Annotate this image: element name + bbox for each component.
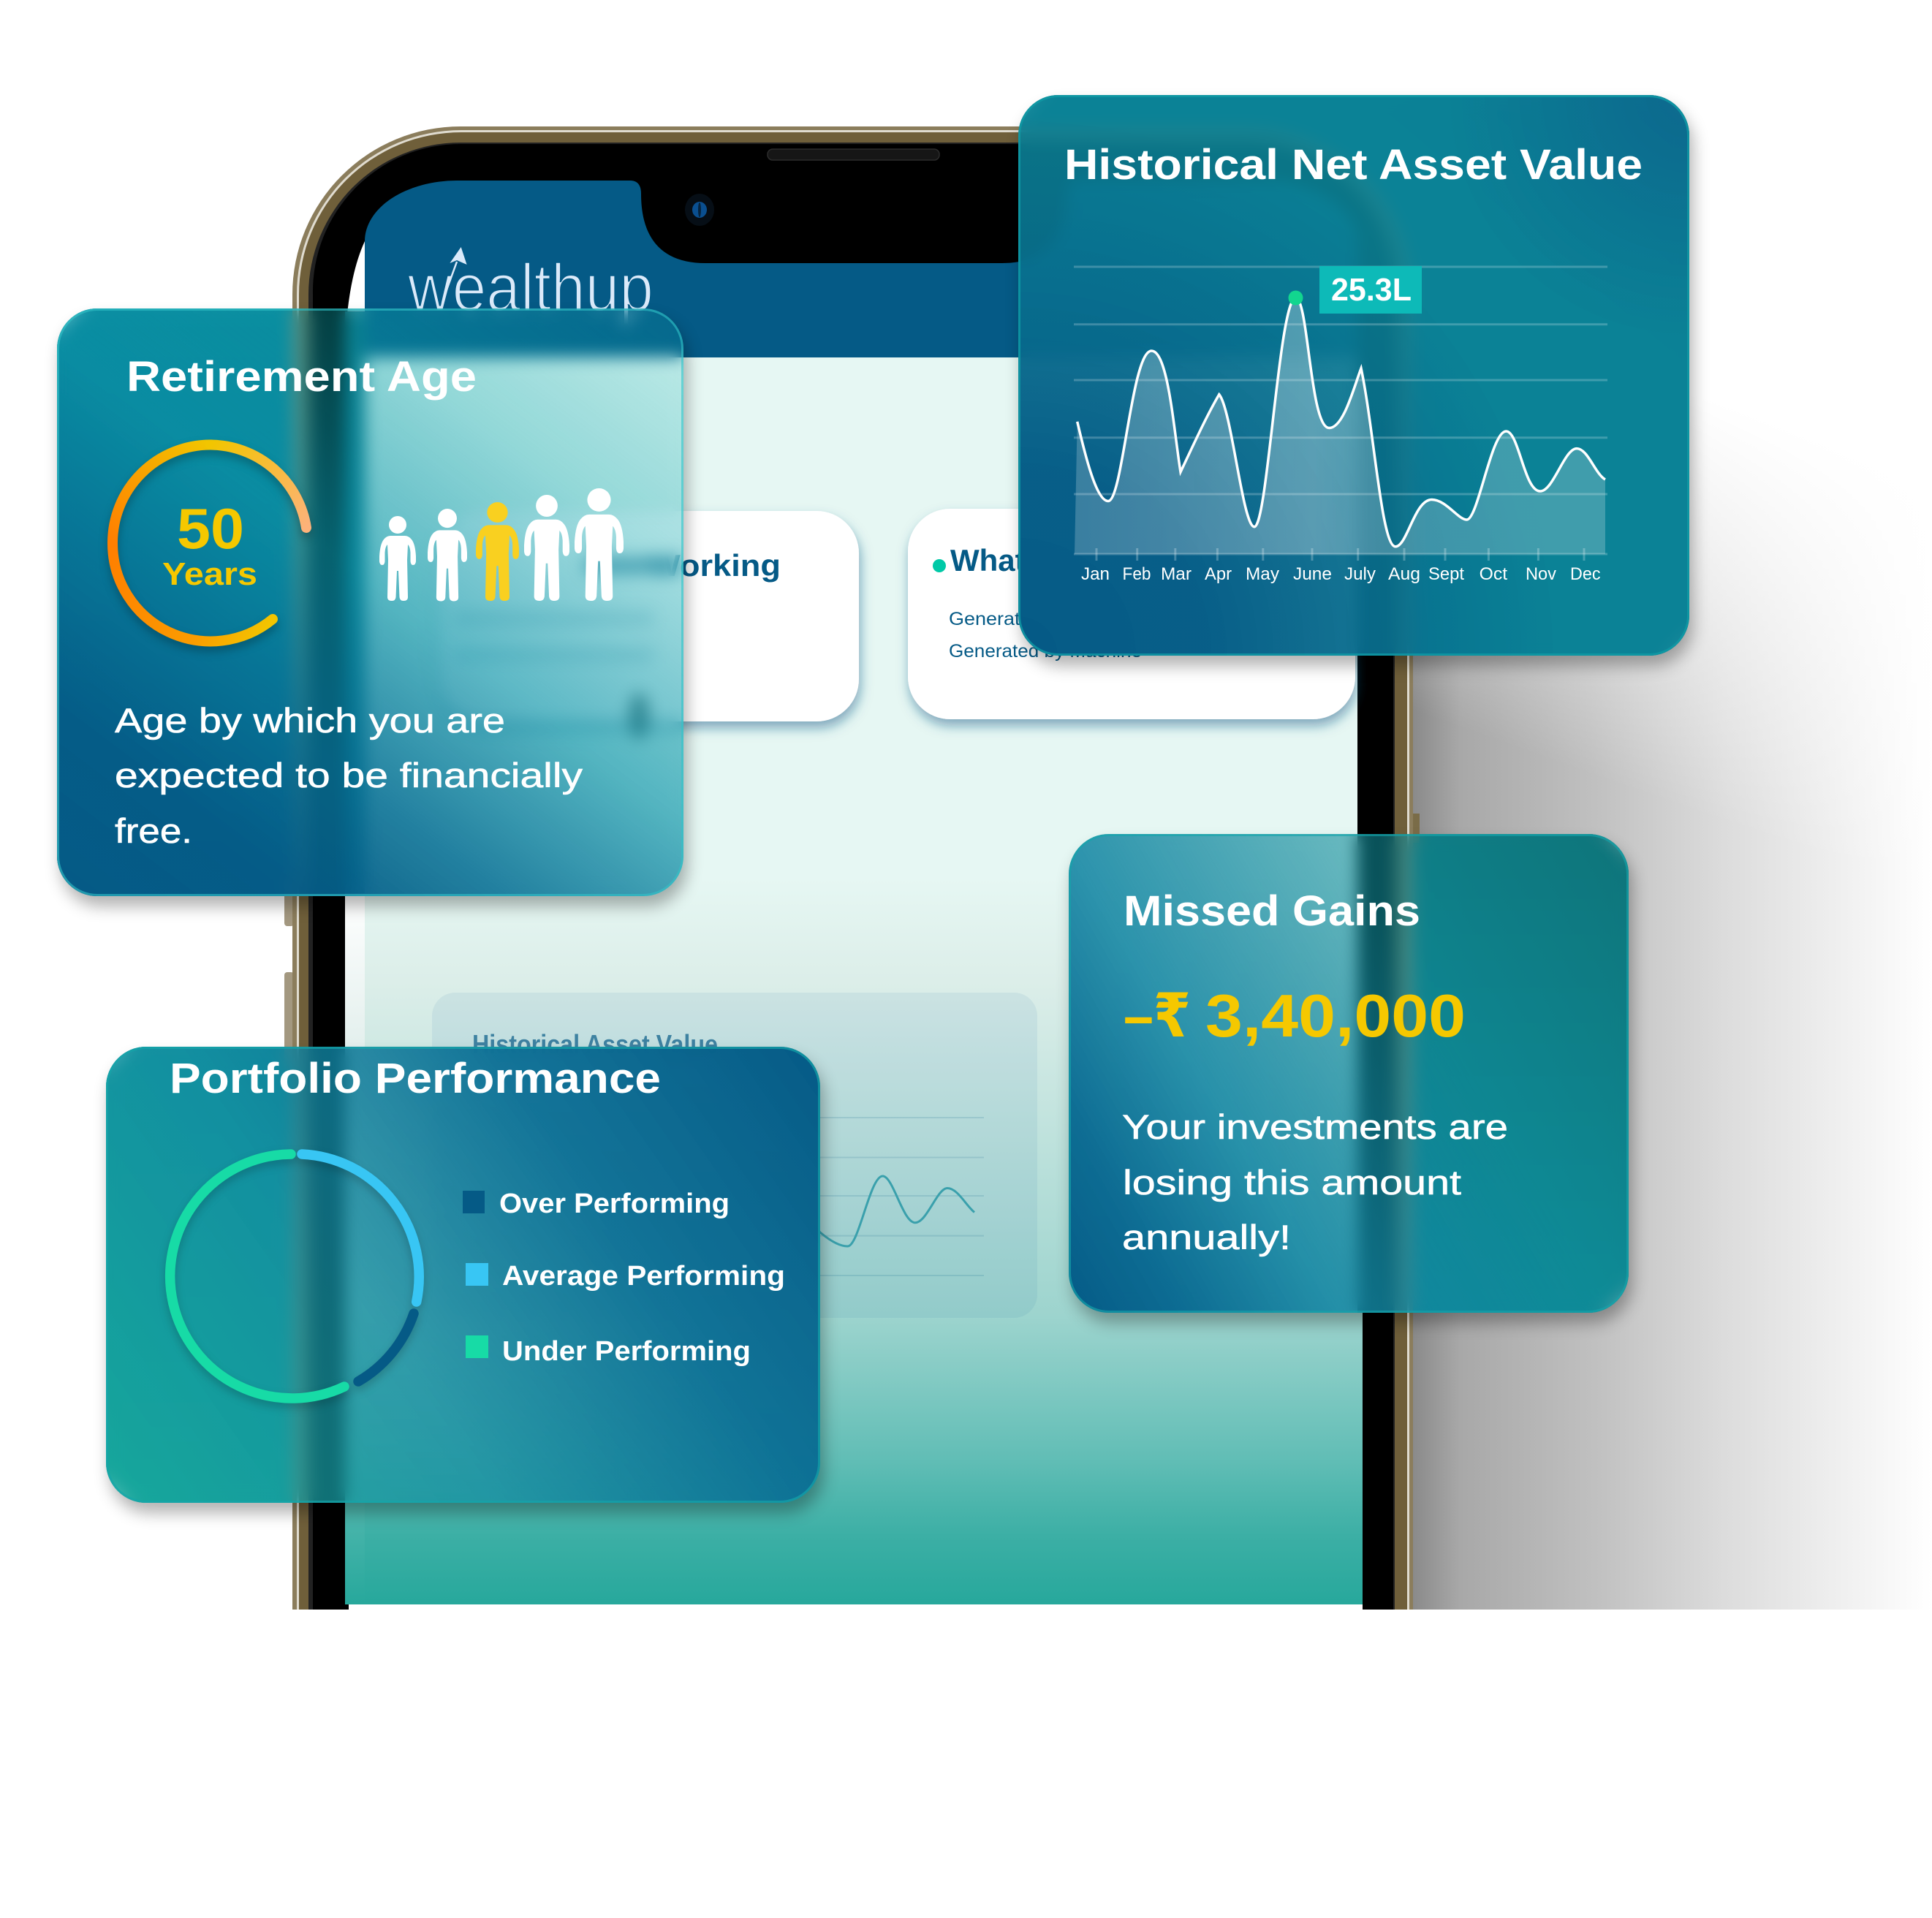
callout: peak value: [1319, 266, 1422, 314]
description text: losing this amount: [1123, 1163, 1461, 1202]
screen card: working: Working: [649, 548, 781, 583]
logo: wealthup: wealthup: [407, 251, 654, 325]
heading: retirement age: Retirement Age: [126, 353, 477, 401]
panel: retirement age: [57, 308, 683, 896]
heading: portfolio performance: Portfolio Performance: [170, 1055, 661, 1102]
donut chart: [170, 1154, 419, 1398]
legend: Over Performing: [499, 1189, 730, 1219]
screen card: what: [908, 509, 1355, 719]
month axis labels: Mar: [1161, 564, 1192, 584]
screen card: what: Generated by Machine: [949, 641, 1142, 662]
month axis labels: Aug: [1388, 564, 1420, 584]
month axis labels: Feb: [1123, 564, 1151, 584]
panel: missed gains: [1069, 834, 1629, 1313]
description text: Age by which you are: [115, 701, 505, 740]
description text: [1122, 1107, 1508, 1256]
legend: [463, 1189, 785, 1367]
screen card: working: [439, 511, 859, 740]
panel: portfolio performance: [106, 1047, 820, 1503]
month axis labels: July: [1344, 564, 1376, 584]
gauge ring: [113, 444, 306, 641]
description text: Your investments are: [1122, 1107, 1508, 1146]
month axis labels: Jan: [1081, 564, 1110, 584]
month axis labels: Sept: [1428, 564, 1464, 584]
description text: [115, 701, 583, 850]
screen card: what: Generated by Human: [949, 609, 1137, 629]
amount: –₹: [1124, 982, 1191, 1050]
month axis labels: Oct: [1480, 564, 1507, 584]
legend: Average Performing: [502, 1261, 785, 1292]
month axis labels: Dec: [1570, 564, 1601, 584]
month axis labels: June: [1293, 564, 1332, 584]
gauge value: 50: [177, 496, 244, 561]
amount: 3,40,000: [1205, 982, 1466, 1050]
panel: historical net asset value: [1018, 95, 1689, 656]
callout: peak value: 25.3L: [1331, 272, 1412, 308]
heading: historical net asset value: Historical Net Asset Value: [1064, 141, 1643, 189]
card backing: historical net asset value: [1018, 95, 1689, 656]
screen header: [365, 181, 1357, 357]
month axis labels: Nov: [1526, 564, 1556, 584]
gap below screen: [349, 1604, 1363, 1611]
card backing: missed gains: [1069, 834, 1629, 1313]
month axis labels: May: [1246, 564, 1279, 584]
card backing: retirement age: [57, 308, 683, 896]
screen chart panel: Historical Asset Value: [472, 1029, 718, 1059]
month axis labels: Apr: [1205, 564, 1232, 584]
right side button: [1411, 814, 1420, 843]
speaker: [768, 149, 939, 160]
screen card: what: What: [950, 543, 1026, 577]
icon: five people: [379, 488, 624, 601]
camera: [685, 194, 714, 226]
phone frame: [292, 126, 1413, 1610]
description text: free.: [115, 811, 192, 850]
month axis labels: [1081, 564, 1601, 584]
gauge unit: Years: [162, 556, 257, 592]
screen chart panel: [432, 993, 1037, 1318]
description text: annually!: [1122, 1218, 1291, 1256]
screen edge strip: [345, 241, 365, 1604]
card backing: portfolio performance: [106, 1047, 820, 1503]
strip behind retirement card: [345, 311, 365, 893]
heading: missed gains: Missed Gains: [1124, 887, 1420, 935]
left side buttons: [284, 877, 294, 1067]
amount: [1124, 982, 1466, 1050]
strip behind portfolio card: [345, 1050, 365, 1500]
screen background: [365, 357, 1357, 1604]
description text: expected to be financially: [115, 756, 583, 795]
line chart: [1074, 267, 1607, 561]
legend: Under Performing: [502, 1336, 751, 1367]
phone drop shadow: [1413, 395, 1932, 1610]
